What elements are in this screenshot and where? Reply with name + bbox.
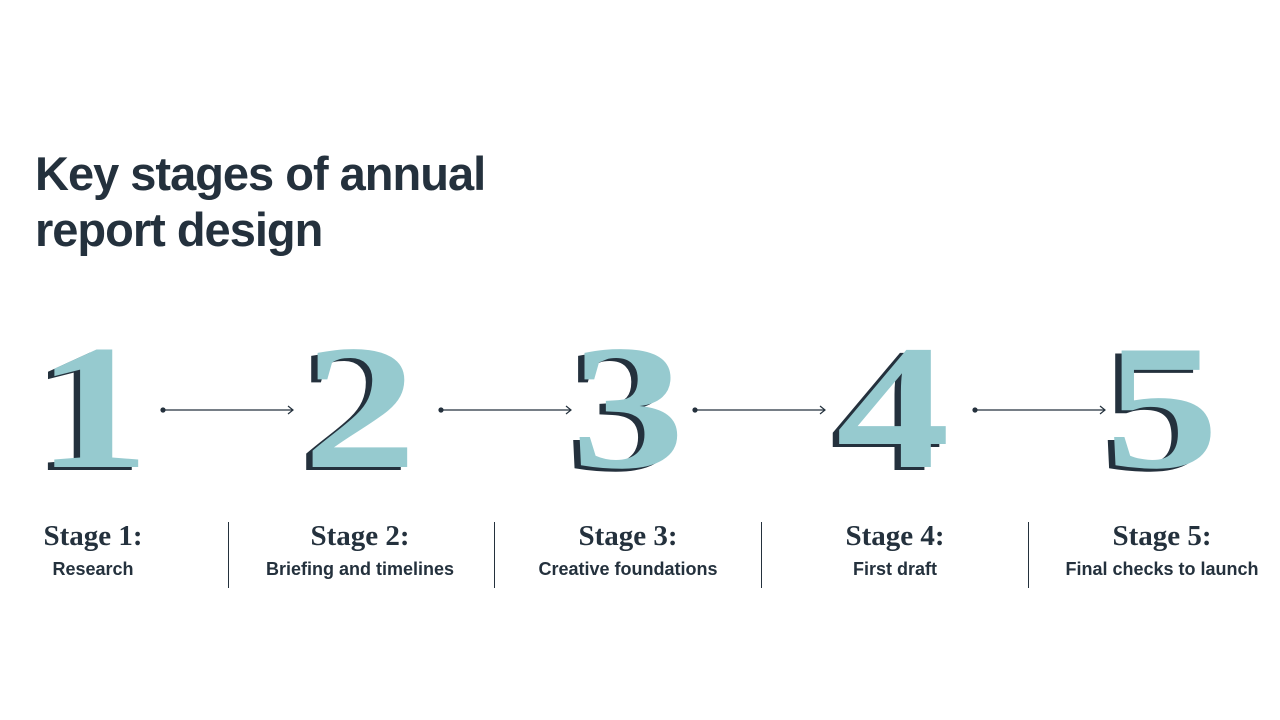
stage 5 label bbox=[1065, 520, 1259, 579]
number 4: 4 bbox=[836, 308, 950, 506]
stage 4 label bbox=[845, 520, 945, 579]
title: Key stages of annual bbox=[35, 147, 485, 200]
stage 2 label: Stage 2: bbox=[310, 520, 410, 552]
stage 4 label: First draft bbox=[853, 559, 937, 579]
number 2: 2 bbox=[303, 308, 417, 506]
stage 5 label: Final checks to launch bbox=[1065, 559, 1259, 579]
stage 1 label: Research bbox=[52, 559, 134, 579]
stage 5 label: Stage 5: bbox=[1112, 520, 1212, 552]
stage 4 label: Stage 4: bbox=[845, 520, 945, 552]
number 3: 3 bbox=[571, 308, 685, 506]
stage 2 label bbox=[266, 520, 454, 579]
stage 3 label: Creative foundations bbox=[538, 559, 718, 579]
stage 1 label bbox=[43, 520, 143, 579]
stage 2 label: Briefing and timelines bbox=[266, 559, 454, 579]
title bbox=[35, 147, 485, 256]
number 1: 1 bbox=[36, 308, 150, 506]
stage 3 label: Stage 3: bbox=[578, 520, 678, 552]
stage 1 label: Stage 1: bbox=[43, 520, 143, 552]
number 5: 5 bbox=[1105, 308, 1219, 506]
title: report design bbox=[35, 203, 322, 256]
stage 3 label bbox=[538, 520, 718, 579]
